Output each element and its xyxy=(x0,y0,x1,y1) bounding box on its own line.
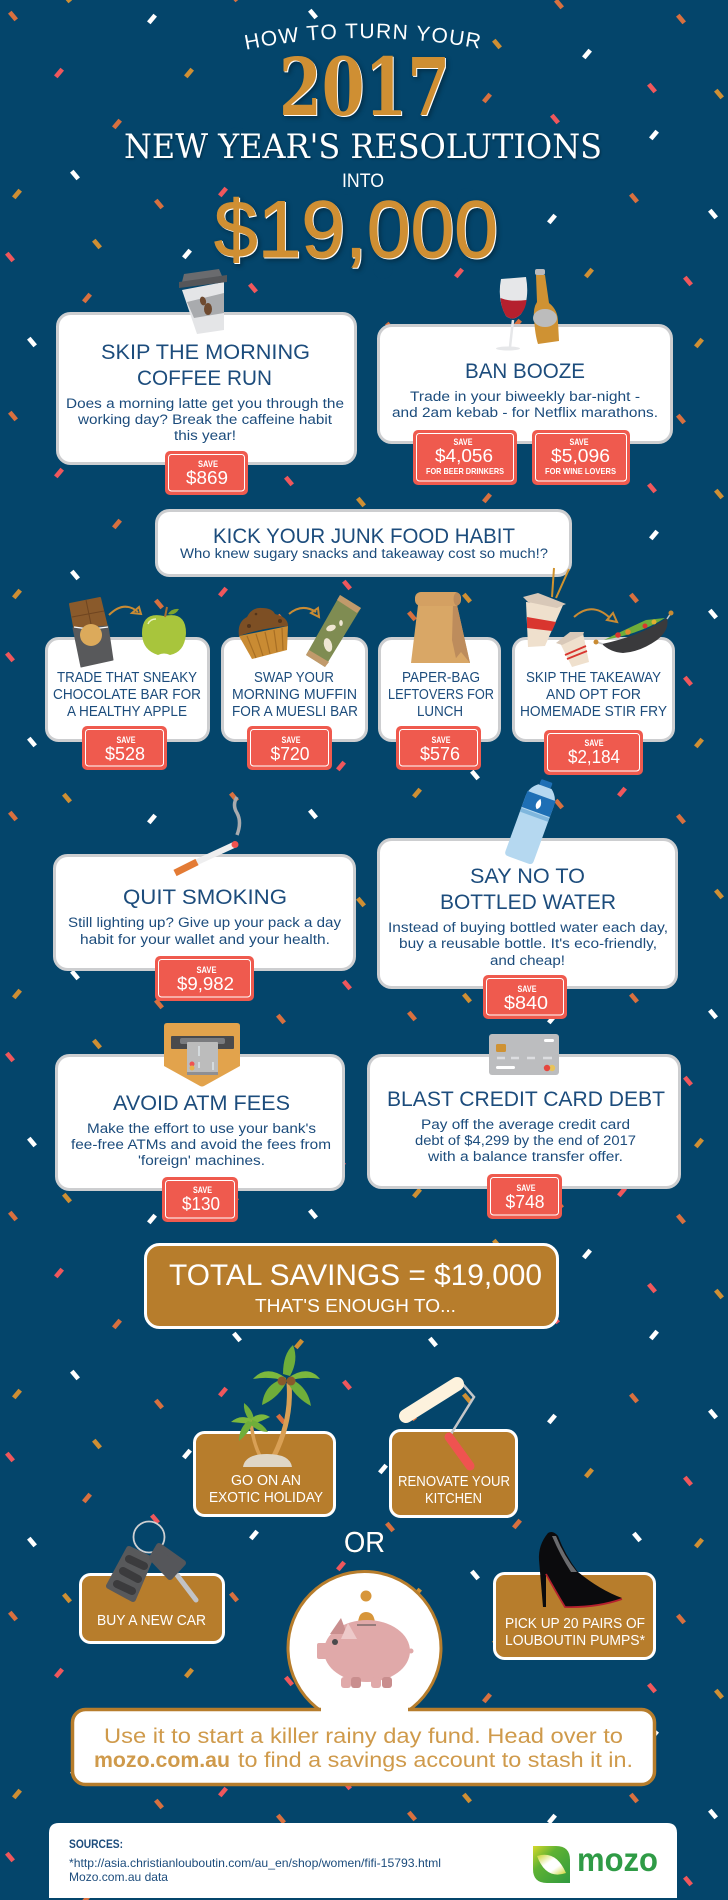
label: kitchen: KITCHEN xyxy=(425,1491,482,1507)
save badge: beer: SAVE xyxy=(454,437,472,447)
sources text: *http://asia.christianlouboutin.com/au_en/shop/women/fifi-15793.html xyxy=(69,1856,441,1870)
save badge: beer: $4,056 xyxy=(435,446,493,466)
text: chocolate: A HEALTHY APPLE xyxy=(67,704,187,720)
icon: beer bottle xyxy=(533,269,559,344)
heading: junk food: KICK YOUR JUNK FOOD HABIT xyxy=(213,525,515,548)
body text: bottled water xyxy=(388,920,668,968)
panel: muffin to muesli bar xyxy=(222,595,366,770)
save badge: $130: SAVE xyxy=(193,1185,212,1195)
label: holiday xyxy=(209,1473,323,1506)
body text: atm: Make the effort to use your bank's xyxy=(87,1121,316,1136)
icon: chopsticks and noodle box xyxy=(523,568,569,647)
icon: apple xyxy=(142,607,186,655)
title: how to turn your: HOW TO TURN YOUR xyxy=(244,24,480,50)
save badge: beer xyxy=(413,430,517,485)
save badge: $130: $130 xyxy=(182,1194,220,1214)
sources text: Mozo.com.au data xyxy=(69,1870,168,1884)
save badge: wine xyxy=(532,430,630,485)
body text: coffee: Does a morning latte get you through the xyxy=(66,396,344,411)
arrow: takeaway to wok xyxy=(574,609,617,622)
body text: atm xyxy=(71,1121,331,1168)
save badge: $840: SAVE xyxy=(518,984,536,994)
save badge: $9,982: $9,982 xyxy=(177,974,234,994)
save badge: $840 xyxy=(483,975,567,1019)
label: kitchen xyxy=(398,1474,510,1507)
save badge: $528 xyxy=(82,726,167,770)
icon: palm trees xyxy=(231,1345,320,1467)
subheading: junk food: Who knew sugary snacks and takeaway cost so much!? xyxy=(180,546,548,561)
body text: booze: and 2am kebab - for Netflix marathons. xyxy=(392,405,658,420)
label: pumps xyxy=(505,1616,645,1649)
save badge: $869: SAVE xyxy=(198,459,218,469)
icon: muesli bar xyxy=(306,595,361,667)
text: paper bag: PAPER-BAG xyxy=(402,670,480,686)
icon: cigarette xyxy=(175,797,240,873)
save badge: $576: SAVE xyxy=(432,735,450,745)
save badge: $576 xyxy=(396,726,481,770)
icon: atm xyxy=(164,1023,240,1086)
panel: paper-bag leftovers xyxy=(380,592,500,770)
logo: mozo xyxy=(533,1841,658,1883)
label: holiday: EXOTIC HOLIDAY xyxy=(209,1490,323,1506)
option: exotic holiday xyxy=(194,1345,334,1516)
title: 2017: 2017 xyxy=(279,40,450,134)
body text: booze: Trade in your biweekly bar-night - xyxy=(410,389,640,404)
save badge: $869 xyxy=(165,451,248,495)
text: muffin: FOR A MUESLI BAR xyxy=(232,704,358,720)
icon: wok xyxy=(594,610,674,653)
icon: paint roller xyxy=(406,1381,474,1466)
body text: atm: fee-free ATMs and avoid the fees from xyxy=(71,1137,331,1152)
icon: wine glass xyxy=(496,277,527,350)
icon: credit card xyxy=(489,1034,559,1075)
icon: paper bag xyxy=(411,592,470,663)
icon: muffin xyxy=(239,608,288,659)
body text: smoking xyxy=(68,915,341,947)
save badge: $528: $528 xyxy=(105,744,145,764)
heading: ban booze: BAN BOOZE xyxy=(465,360,585,383)
save badge: wine: $5,096 xyxy=(551,446,610,466)
text: muffin: MORNING MUFFIN xyxy=(232,687,357,703)
label: pumps: PICK UP 20 PAIRS OF xyxy=(505,1616,645,1632)
save badge: wine: FOR WINE LOVERS xyxy=(545,466,616,476)
callout: rainy day fund with piggy bank xyxy=(72,1572,654,1784)
text: takeaway: AND OPT FOR xyxy=(546,687,641,703)
icon: car keys xyxy=(109,1522,196,1600)
callout text: to find a savings account to stash it in. xyxy=(238,1749,633,1772)
body text: credit card xyxy=(415,1117,636,1164)
icon: small takeaway cup xyxy=(556,632,589,667)
heading: coffee xyxy=(101,341,310,390)
save badge: $576: $576 xyxy=(420,744,460,764)
title: into: INTO xyxy=(342,170,384,192)
panel: sources xyxy=(49,1823,677,1898)
text: muffin: SWAP YOUR xyxy=(254,670,334,686)
text: paper bag: LEFTOVERS FOR xyxy=(388,687,494,703)
save badge: $130 xyxy=(162,1177,238,1222)
label: car: BUY A NEW CAR xyxy=(97,1613,206,1629)
total savings figure: TOTAL SAVINGS = $19,000 xyxy=(169,1259,542,1292)
label: pumps: LOUBOUTIN PUMPS* xyxy=(505,1633,645,1649)
heading: bottled water xyxy=(440,865,616,914)
divider word: or: OR xyxy=(344,1527,385,1559)
save badge: $2,184: SAVE xyxy=(584,738,604,748)
heading: quit smoking: QUIT SMOKING xyxy=(123,886,287,909)
text: muffin xyxy=(232,670,358,720)
panel: takeaway to stir fry xyxy=(514,568,674,775)
save badge: $9,982: SAVE xyxy=(196,965,216,975)
that's enough to: THAT'S ENOUGH TO... xyxy=(255,1295,456,1316)
panel: say no to bottled water xyxy=(378,776,676,1019)
panel: avoid atm fees xyxy=(56,1023,344,1222)
body text: credit card: debt of $4,299 by the end of 2017 xyxy=(415,1133,636,1148)
sources text xyxy=(69,1837,441,1884)
icon: high heel shoe xyxy=(539,1532,622,1607)
save badge: $748 xyxy=(487,1174,562,1219)
panel: chocolate to apple xyxy=(46,598,208,770)
body text: booze xyxy=(392,389,658,420)
save badge: wine: SAVE xyxy=(570,437,588,447)
text: paper bag: LUNCH xyxy=(417,704,463,720)
text: takeaway: HOMEMADE STIR FRY xyxy=(520,704,667,720)
save badge: beer: FOR BEER DRINKERS xyxy=(426,466,504,476)
panel: blast credit card debt xyxy=(368,1034,680,1219)
option: renovate kitchen xyxy=(390,1381,516,1516)
text: takeaway: SKIP THE TAKEAWAY xyxy=(526,670,661,686)
body text: coffee: working day? Break the caffeine habit xyxy=(77,412,332,427)
body text: bottled water: buy a reusable bottle. It's eco-friendly, xyxy=(399,936,657,951)
save badge: $720: SAVE xyxy=(282,735,300,745)
save badge: $869: $869 xyxy=(186,468,228,488)
body text: credit card: with a balance transfer offer. xyxy=(427,1149,623,1164)
panel: total savings xyxy=(146,1244,558,1328)
body text: coffee: this year! xyxy=(174,428,236,443)
panel: kick your junk food habit xyxy=(156,510,570,576)
save badge: $840: $840 xyxy=(504,993,548,1013)
text: takeaway xyxy=(520,670,667,720)
text: chocolate xyxy=(53,670,201,720)
title: new year's resolutions: NEW YEAR'S RESOLUTIONS xyxy=(124,127,602,167)
heading: credit card: BLAST CREDIT CARD DEBT xyxy=(387,1088,665,1111)
callout text: mozo.com.au xyxy=(94,1749,230,1772)
text: chocolate: CHOCOLATE BAR FOR xyxy=(53,687,201,703)
body text: smoking: Still lighting up? Give up your pack a day xyxy=(68,915,341,930)
save badge: $2,184: $2,184 xyxy=(568,747,620,767)
title: $19,000: $19,000 xyxy=(214,185,498,275)
body text: coffee xyxy=(66,396,344,443)
heading: atm fees: AVOID ATM FEES xyxy=(113,1092,290,1115)
save badge: $748: SAVE xyxy=(516,1183,536,1193)
title block xyxy=(124,24,602,275)
body text: atm: 'foreign' machines. xyxy=(138,1153,265,1168)
body text: bottled water: Instead of buying bottled water each day, xyxy=(388,920,668,935)
callout text xyxy=(94,1725,633,1772)
icon: coffee cup xyxy=(179,269,227,334)
text: chocolate: TRADE THAT SNEAKY xyxy=(57,670,197,686)
save badge: $748: $748 xyxy=(506,1192,544,1212)
callout text: Use it to start a killer rainy day fund. Head over to xyxy=(104,1725,623,1748)
save badge: $9,982 xyxy=(155,956,254,1001)
save badge: $720: $720 xyxy=(270,744,310,764)
icon: piggy bank xyxy=(317,1590,414,1688)
option: new car xyxy=(80,1522,224,1642)
label: kitchen: RENOVATE YOUR xyxy=(398,1474,510,1490)
heading: coffee: SKIP THE MORNING xyxy=(101,341,310,364)
heading: bottled water: BOTTLED WATER xyxy=(440,891,616,914)
panel: skip the morning coffee run xyxy=(58,269,356,495)
save badge: $528: SAVE xyxy=(116,735,136,745)
icon: water bottle xyxy=(504,776,561,865)
sources text: SOURCES: xyxy=(69,1837,123,1851)
save badge: $2,184 xyxy=(544,730,643,775)
text: paper bag xyxy=(388,670,494,720)
save badge: $720 xyxy=(247,726,332,770)
icon: chocolate bar xyxy=(70,598,113,667)
heading: bottled water: SAY NO TO xyxy=(470,865,585,888)
logo: mozo: mozo xyxy=(577,1841,658,1878)
arrow: chocolate to apple xyxy=(109,607,141,615)
label: holiday: GO ON AN xyxy=(231,1473,301,1489)
body text: smoking: habit for your wallet and your health. xyxy=(80,932,330,947)
arrow: muffin to bar xyxy=(289,608,319,617)
body text: credit card: Pay off the average credit card xyxy=(421,1117,630,1132)
heading: coffee: COFFEE RUN xyxy=(137,367,272,390)
panel: ban booze xyxy=(378,269,672,485)
body text: bottled water: and cheap! xyxy=(490,953,565,968)
panel: quit smoking xyxy=(54,797,354,1001)
option: louboutin pumps xyxy=(494,1532,654,1658)
